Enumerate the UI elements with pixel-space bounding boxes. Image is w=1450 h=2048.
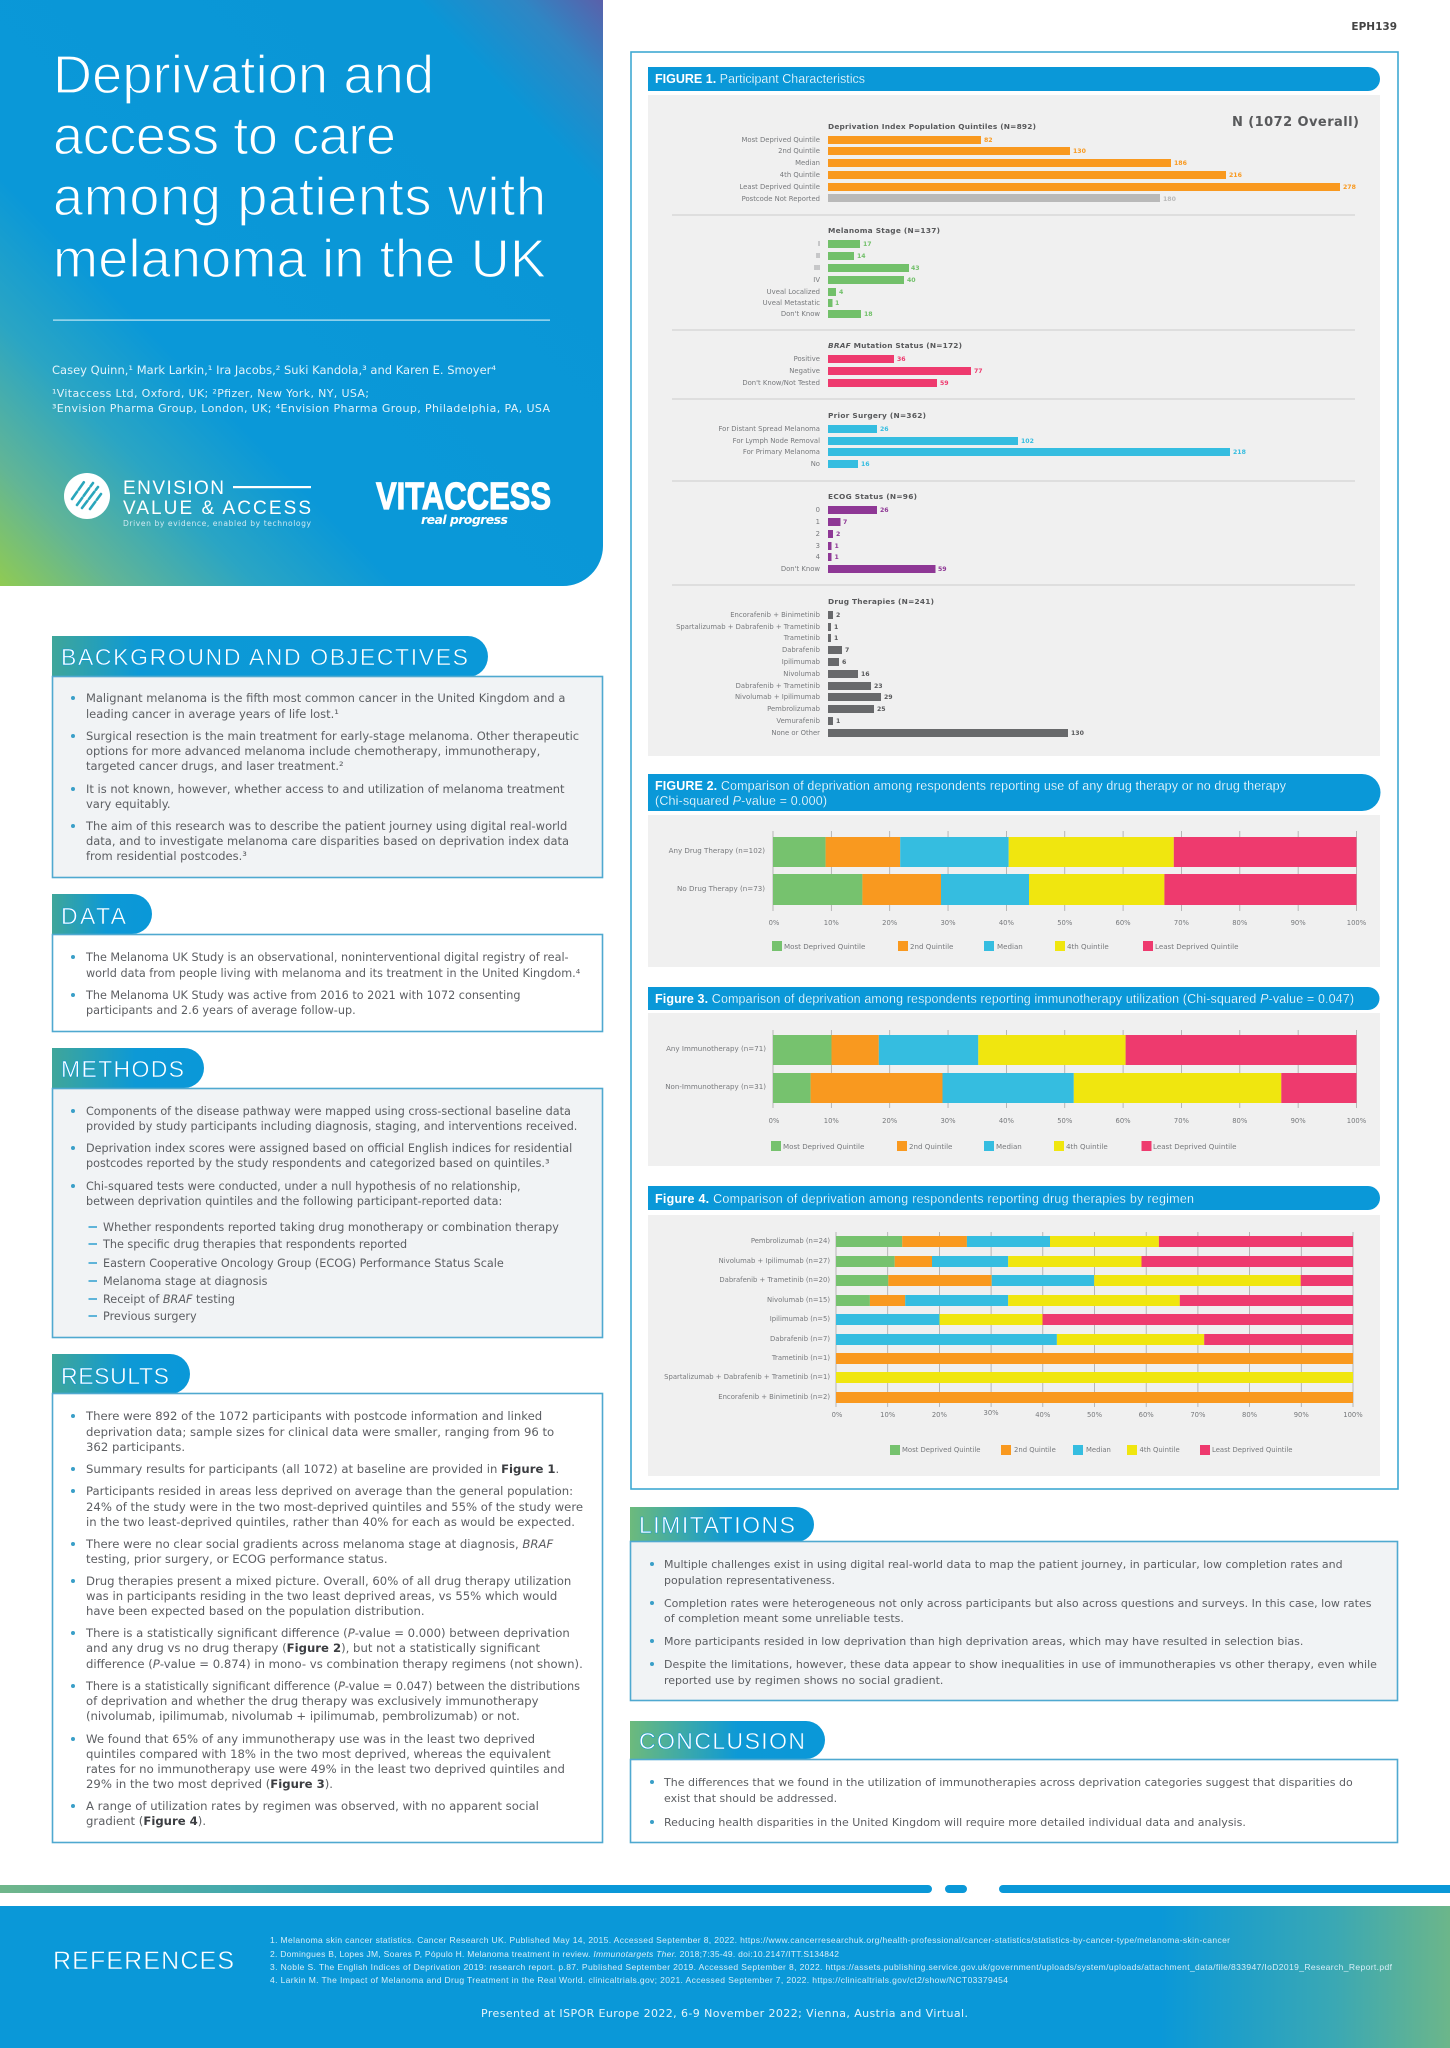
chart: drug therapies: Pembrolizumab: [767, 705, 820, 713]
axis labels: 70%: [1190, 1411, 1206, 1419]
heading: conclusion: [630, 1721, 825, 1759]
heading: results: [52, 1354, 190, 1394]
chart: drug therapies: Drug Therapies (N=241): [828, 597, 934, 606]
row labels: Nivolumab + Ipilimumab (n=27): [719, 1257, 830, 1265]
chart: melanoma stage: [763, 226, 940, 318]
axis labels: 90%: [1291, 919, 1306, 927]
results text: There is a statistically significant difference (P-value = 0.000) between deprivation: [86, 1626, 570, 1640]
chart: deprivation index quintiles: 82: [984, 137, 993, 144]
axis labels: 40%: [1035, 1411, 1051, 1419]
chart: ECOG status: 7: [843, 519, 847, 526]
axis labels: 30%: [940, 919, 956, 927]
chart: drug therapies: 25: [877, 706, 886, 713]
chart: BRAF mutation status: BRAF Mutation Status (N=172): [828, 341, 962, 350]
limitations text: More participants resided in low deprivation than high deprivation areas, which may have resulted in selection bias.: [664, 1635, 1303, 1648]
row labels: Non-Immunotherapy (n=31): [665, 1082, 766, 1091]
stacked bars by regimen: [836, 1236, 1353, 1403]
results text: There were 892 of the 1072 participants with postcode information and linked: [85, 1409, 542, 1423]
legend: Median: [996, 1142, 1022, 1151]
background text: from residential postcodes.³: [86, 849, 247, 863]
legend: 2nd Quintile: [1014, 1446, 1056, 1454]
chart: prior surgery: Prior Surgery (N=362): [828, 411, 926, 420]
chart: prior surgery: [718, 411, 1246, 468]
heading: methods: METHODS: [61, 1056, 184, 1082]
footer stripe: [0, 1885, 1450, 1893]
legend: Least Deprived Quintile: [1212, 1446, 1293, 1454]
data text: world data from people living with melanoma and its treatment in the United Kingdom.⁴: [86, 967, 581, 980]
dashes: [88, 1227, 97, 1316]
axis labels: 70%: [1174, 919, 1190, 927]
title: melanoma in the UK: [53, 229, 546, 289]
chart: deprivation index quintiles: Median: [795, 159, 820, 167]
chart: drug therapies: Spartalizumab + Dabrafenib + Trametinib: [676, 623, 820, 631]
figure 3 chart panel: [648, 1013, 1380, 1166]
background text: The aim of this research was to describe the patient journey using digital real-world: [85, 819, 567, 833]
figure 2 header: [648, 774, 1380, 811]
row labels: [665, 1044, 766, 1091]
results text: 362 participants.: [86, 1440, 185, 1454]
reference list: 3. Noble S. The English Indices of Deprivation 2019: research report. p.87. Published September 2019. Accessed September 8, 2022. https://assets.publishing.service.gov.uk/government/uploads/system/uploads/attachment_data/file/833947/IoD2019_Research_Report.pdf: [270, 1962, 1393, 1972]
chart: deprivation index quintiles: 180: [1163, 196, 1177, 203]
affiliations: ¹Vitaccess Ltd, Oxford, UK; ²Pfizer, New York, NY, USA;: [52, 387, 369, 400]
methods sub-list: Receipt of BRAF testing: [103, 1293, 235, 1306]
chart: deprivation index quintiles: 4th Quintile: [780, 171, 820, 179]
axis labels: 90%: [1291, 1117, 1306, 1125]
background text: options for more advanced melanoma include chemotherapy, immunotherapy,: [86, 744, 540, 758]
chart: deprivation index quintiles: 130: [1073, 148, 1087, 155]
chart: prior surgery: For Lymph Node Removal: [733, 437, 820, 445]
figure 4 header: [648, 1186, 1380, 1210]
chart: drug therapies: 7: [845, 647, 849, 654]
chart: drug therapies: Dabrafenib + Trametinib: [736, 682, 820, 690]
reference list: [270, 1935, 1393, 1985]
heading: background and objectives: BACKGROUND AND OBJECTIVES: [61, 644, 468, 670]
chart: prior surgery: 16: [861, 461, 870, 468]
results text: (nivolumab, ipilimumab, nivolumab + ipilimumab, pembrolizumab) or not.: [86, 1709, 520, 1723]
heading: data: DATA: [61, 903, 127, 929]
chart: melanoma stage: Uveal Metastatic: [763, 299, 820, 307]
axis labels: 60%: [1139, 1411, 1154, 1419]
data text: The Melanoma UK Study is an observational, noninterventional digital registry of real-: [85, 951, 569, 964]
logo: Envision Value and Access: ENVISION: [123, 478, 224, 499]
axis labels: 40%: [999, 919, 1014, 927]
chart: ECOG status: 1: [834, 543, 839, 550]
heading: results: RESULTS: [61, 1363, 169, 1389]
reference list: 4. Larkin M. The Impact of Melanoma and Drug Treatment in the Real World. clinicaltrials.gov; 2021. Accessed September 7, 2022. https://clinicaltrials.gov/ct2/show/NCT03379454: [270, 1975, 1008, 1985]
data text: The Melanoma UK Study was active from 2016 to 2021 with 1072 consenting: [85, 989, 521, 1002]
results text: 24% of the study were in the two most-deprived quintiles and 55% of the study were: [86, 1500, 583, 1514]
chart: drug therapies: 1: [836, 718, 840, 725]
axis labels: 50%: [1087, 1411, 1103, 1419]
chart: drug therapies: Dabrafenib: [782, 646, 820, 654]
figure 2 header: FIGURE 2. Comparison of deprivation among respondents reporting use of any drug therapy or no drug therapy: [655, 779, 1287, 793]
chart: ECOG status: [781, 492, 947, 573]
figure 1 chart panel: [648, 95, 1380, 756]
stacked bar: non-immunotherapy: [773, 1073, 1356, 1103]
axis labels: [832, 1409, 1363, 1419]
chart: drug therapies: [676, 597, 1085, 737]
chart: BRAF mutation status: 36: [897, 356, 906, 363]
chart: prior surgery: 218: [1233, 449, 1246, 456]
poster code: EPH139: [1351, 21, 1397, 33]
methods sub-list: The specific drug therapies that respondents reported: [102, 1238, 407, 1251]
chart: prior surgery: 102: [1021, 438, 1034, 445]
chart: deprivation index quintiles: [739, 122, 1356, 203]
legend: 4th Quintile: [1067, 942, 1109, 951]
legend: Least Deprived Quintile: [1155, 942, 1238, 951]
chart: deprivation index quintiles: 186: [1174, 160, 1187, 167]
chart: ECOG status: Don't Know: [781, 565, 820, 573]
logo: Envision Value and Access: VALUE & ACCESS: [123, 498, 311, 519]
grid lines: [773, 1030, 1356, 1108]
chart: drug therapies: Ipilimumab: [782, 658, 820, 666]
chart: melanoma stage: 14: [857, 253, 866, 260]
row labels: Nivolumab (n=15): [767, 1296, 830, 1304]
stacked bar: any drug therapy: [773, 837, 1356, 867]
panel: data: [52, 934, 602, 1032]
figure 3 header: [648, 987, 1380, 1010]
figures frame: [631, 52, 1398, 1489]
chart: drug therapies: 23: [874, 683, 883, 690]
chart: melanoma stage: Melanoma Stage (N=137): [828, 226, 940, 235]
figure 3 header: Figure 3. Comparison of deprivation among respondents reporting immunotherapy utilization (Chi-squared P-value = 0.047): [655, 992, 1354, 1006]
heading: limitations: LIMITATIONS: [639, 1512, 795, 1538]
references heading: REFERENCES: [53, 1947, 234, 1975]
results text: A range of utilization rates by regimen was observed, with no apparent social: [86, 1799, 539, 1813]
methods text: Components of the disease pathway were mapped using cross-sectional baseline data: [86, 1105, 571, 1118]
chart: ECOG status: ECOG Status (N=96): [828, 492, 917, 501]
overall N callout: N (1072 Overall): [1232, 115, 1359, 130]
axis labels: 70%: [1174, 1117, 1190, 1125]
results text: 29% in the two most deprived (Figure 3).: [86, 1777, 333, 1791]
limitations text: Completion rates were heterogeneous not only across participants but also across questions and surveys. In this case, low rates: [664, 1597, 1372, 1610]
panel: results: [52, 1394, 602, 1842]
methods sub-list: Whether respondents reported taking drug monotherapy or combination therapy: [103, 1221, 559, 1234]
chart: melanoma stage: Don't Know: [781, 310, 820, 318]
axis labels: 100%: [1343, 1411, 1363, 1419]
chart: melanoma stage: 40: [907, 277, 916, 284]
chart: deprivation index quintiles: Postcode Not Reported: [742, 195, 820, 203]
results text: Summary results for participants (all 1072) at baseline are provided in Figure 1.: [86, 1462, 559, 1476]
row labels: [669, 846, 765, 893]
chart: deprivation index quintiles: Least Deprived Quintile: [739, 183, 820, 191]
row labels: No Drug Therapy (n=73): [677, 884, 765, 893]
title: access to care: [53, 106, 396, 166]
row labels: Dabrafenib + Trametinib (n=20): [719, 1276, 830, 1284]
axis labels: 80%: [1242, 1411, 1258, 1419]
affiliations: [52, 387, 550, 415]
chart: ECOG status: 59: [938, 566, 947, 573]
figure 4 header: Figure 4. Comparison of deprivation among respondents reporting drug therapies by regimen: [655, 1192, 1194, 1206]
title panel: [0, 0, 603, 586]
row labels: Dabrafenib (n=7): [770, 1335, 830, 1343]
legend: 2nd Quintile: [910, 942, 953, 951]
bullets: [71, 698, 75, 826]
presentation note: Presented at ISPOR Europe 2022, 6-9 November 2022; Vienna, Austria and Virtual.: [481, 2007, 968, 2020]
row labels: Any Drug Therapy (n=102): [669, 846, 765, 855]
panel: background and objectives: [52, 676, 602, 878]
bullets: [71, 1416, 75, 1806]
chart: ECOG status: 4: [816, 553, 820, 561]
axis labels: 30%: [940, 1117, 956, 1125]
axis labels: 100%: [1347, 1117, 1367, 1125]
axis labels: 20%: [882, 1117, 898, 1125]
bullets: [71, 1111, 75, 1186]
results text: testing, prior surgery, or ECOG performance status.: [86, 1552, 388, 1566]
logo: Envision Value and Access: Driven by evidence, enabled by technology: [123, 519, 312, 528]
chart: drug therapies: None or Other: [771, 729, 820, 737]
row labels: [664, 1237, 830, 1401]
conclusion text: Reducing health disparities in the United Kingdom will require more detailed individual data and analysis.: [664, 1816, 1246, 1829]
panel: conclusion: [630, 1760, 1398, 1842]
chart: melanoma stage: I: [818, 240, 820, 248]
background text: vary equitably.: [86, 797, 171, 811]
methods sub-list: Previous surgery: [103, 1310, 197, 1323]
title: among patients with: [53, 167, 546, 227]
results text: Drug therapies present a mixed picture. Overall, 60% of all drug therapy utilization: [86, 1574, 571, 1588]
chart: BRAF mutation status: [742, 341, 983, 387]
axis labels: 80%: [1232, 919, 1248, 927]
results text: Participants resided in areas less deprived on average than the general population:: [86, 1484, 573, 1498]
legend: Least Deprived Quintile: [1153, 1142, 1236, 1151]
bullets: [71, 957, 75, 995]
axis labels: 60%: [1116, 1117, 1131, 1125]
chart: drug therapies: Trametinib: [783, 634, 820, 642]
chart: drug therapies: 1: [834, 624, 838, 631]
chart: ECOG status: 1: [834, 554, 839, 561]
methods sub-list: Eastern Cooperative Oncology Group (ECOG) Performance Status Scale: [103, 1257, 504, 1270]
axis labels: 20%: [882, 919, 898, 927]
chart: BRAF mutation status: Negative: [789, 367, 820, 375]
legend: Most Deprived Quintile: [783, 1142, 864, 1151]
background text: data, and to investigate melanoma care disparities based on deprivation index data: [86, 834, 569, 848]
limitations text: reported use by regimen shows no social gradient.: [664, 1674, 943, 1687]
legend: Median: [1086, 1446, 1111, 1454]
authors: Casey Quinn,¹ Mark Larkin,¹ Ira Jacobs,² Suki Kandola,³ and Karen E. Smoyer⁴: [52, 363, 496, 377]
chart: drug therapies: Vemurafenib: [776, 717, 820, 725]
row labels: Pembrolizumab (n=24): [751, 1237, 830, 1245]
chart: BRAF mutation status: 77: [974, 368, 983, 375]
chart: ECOG status: 2: [816, 530, 820, 538]
limitations text: Multiple challenges exist in using digital real-world data to map the patient journey, in particular, low completion rates and: [664, 1558, 1343, 1571]
chart: prior surgery: For Distant Spread Melanoma: [718, 425, 820, 433]
title: [53, 45, 546, 289]
conclusion text: The differences that we found in the utilization of immunotherapies across deprivation categories suggest that disparities do: [663, 1776, 1353, 1789]
chart: BRAF mutation status: Don't Know/Not Tested: [742, 379, 820, 387]
results text: of deprivation and whether the drug therapy was exclusively immunotherapy: [86, 1694, 539, 1708]
background text: leading cancer in average years of life lost.¹: [86, 707, 339, 721]
chart: drug therapies: 6: [842, 659, 846, 666]
axis labels: 10%: [880, 1411, 896, 1419]
chart: drug therapies: 29: [884, 694, 893, 701]
legend: [772, 941, 1238, 951]
methods text: Chi-squared tests were conducted, under a null hypothesis of no relationship,: [86, 1180, 521, 1193]
figure 4 chart panel: [648, 1215, 1380, 1476]
results text: and any drug vs no drug therapy (Figure 2), but not a statistically significant: [86, 1641, 540, 1655]
affiliations: ³Envision Pharma Group, London, UK; ⁴Envision Pharma Group, Philadelphia, PA, USA: [52, 402, 550, 415]
results line: P-value 0.047: There is a statistically significant difference (P-value = 0.047) between the distributions: [85, 1680, 580, 1693]
legend: 4th Quintile: [1066, 1142, 1108, 1151]
grid lines: [773, 831, 1356, 911]
axis labels: 60%: [1116, 919, 1131, 927]
methods text: between deprivation quintiles and the following participant-reported data:: [86, 1195, 502, 1208]
axis labels: 40%: [999, 1117, 1014, 1125]
conclusion text: exist that should be addressed.: [664, 1792, 837, 1805]
legend: Median: [997, 942, 1023, 951]
logo: Envision Value and Access: [64, 473, 312, 528]
row labels: Any Immunotherapy (n=71): [666, 1044, 766, 1053]
row labels: Encorafenib + Binimetinib (n=2): [718, 1393, 830, 1401]
chart: melanoma stage: IV: [813, 276, 820, 284]
data text: participants and 2.6 years of average follow-up.: [86, 1004, 356, 1017]
chart: deprivation index quintiles: Most Deprived Quintile: [742, 136, 820, 144]
results text: rates for no immunotherapy use were 49% in the least two deprived quintiles and: [86, 1762, 565, 1776]
chart: melanoma stage: II: [816, 252, 820, 260]
chart: melanoma stage: Uveal Localized: [767, 288, 820, 296]
figure 1 header: FIGURE 1. Participant Characteristics: [655, 72, 865, 86]
axis labels: 30%: [984, 1409, 999, 1417]
references footer: [0, 1906, 1450, 2048]
chart: drug therapies: 16: [861, 671, 870, 678]
chart: BRAF mutation status: 59: [940, 380, 949, 387]
title divider: [53, 320, 550, 321]
results text: have been expected based on the population distribution.: [86, 1604, 425, 1618]
figure 2 header: (Chi-squared P-value = 0.000): [655, 794, 827, 808]
chart: drug therapies: 130: [1071, 730, 1085, 737]
results text: in the two least-deprived quintiles, rather than 40% for each as would be expected.: [86, 1515, 575, 1529]
grid lines: [836, 1232, 1353, 1407]
chart: drug therapies: 1: [834, 635, 838, 642]
heading: limitations: [630, 1507, 814, 1542]
axis labels: 50%: [1057, 919, 1073, 927]
results text: gradient (Figure 4).: [86, 1814, 206, 1828]
methods text: provided by study participants including diagnosis, staging, and interventions received.: [86, 1120, 577, 1133]
logo: Vitaccess: VITACCESS: [376, 476, 551, 518]
chart: ECOG status: 1: [816, 518, 820, 526]
chart: melanoma stage: 4: [839, 289, 844, 296]
chart: prior surgery: No: [811, 460, 820, 468]
methods sub-list: Melanoma stage at diagnosis: [103, 1275, 268, 1288]
background text: targeted cancer drugs, and laser treatment.²: [86, 759, 344, 773]
bullets: [650, 1782, 654, 1822]
methods text: Deprivation index scores were assigned based on official English indices for residential: [86, 1142, 572, 1155]
stacked bar: any immunotherapy: [773, 1035, 1356, 1065]
results text: We found that 65% of any immunotherapy use was in the least two deprived: [86, 1732, 535, 1746]
axis labels: 10%: [824, 1117, 839, 1125]
bullets: [650, 1564, 654, 1664]
axis labels: 90%: [1294, 1411, 1309, 1419]
chart: melanoma stage: III: [814, 264, 820, 272]
background text: It is not known, however, whether access to and utilization of melanoma treatment: [86, 782, 565, 796]
figure 2 chart panel: [648, 815, 1380, 967]
chart: ECOG status: 2: [836, 531, 840, 538]
chart: BRAF mutation status: Positive: [794, 355, 820, 363]
results text: There were no clear social gradients across melanoma stage at diagnosis, BRAF: [86, 1537, 553, 1551]
background text: Malignant melanoma is the fifth most common cancer in the United Kingdom and a: [86, 691, 565, 705]
row labels: Ipilimumab (n=5): [770, 1315, 830, 1323]
stacked bar: no drug therapy: [773, 874, 1356, 905]
logo: Vitaccess: [376, 476, 551, 527]
chart: deprivation index quintiles: 2nd Quintile: [778, 147, 820, 155]
row labels: Spartalizumab + Dabrafenib + Trametinib (n=1): [664, 1373, 830, 1381]
reference list: 1. Melanoma skin cancer statistics. Cancer Research UK. Published May 14, 2015. Accessed September 8, 2022. https://www.cancerresearchuk.org/health-professional/cancer-statistics/statistics-by-cancer-type/melanoma-skin-cancer: [270, 1935, 1230, 1945]
logo: Vitaccess: real progress: [421, 512, 508, 527]
chart: ECOG status: 0: [816, 506, 820, 514]
results text: difference (P-value = 0.874) in mono- vs combination therapy regimens (not shown).: [86, 1657, 583, 1671]
chart: drug therapies: Nivolumab: [783, 670, 820, 678]
background text: Surgical resection is the main treatment for early-stage melanoma. Other therapeutic: [86, 729, 579, 743]
chart: deprivation index quintiles: 216: [1229, 172, 1242, 179]
axis labels: 0%: [769, 919, 780, 927]
chart: melanoma stage: 18: [864, 311, 873, 318]
reference list: 2. Domingues B, Lopes JM, Soares P, Pópulo H. Melanoma treatment in review. Immunotargets Ther. 2018;7:35-49. doi:10.2147/ITT.S134842: [270, 1949, 839, 1959]
chart: drug therapies: Nivolumab + Ipilimumab: [735, 693, 820, 701]
axis labels: 10%: [824, 919, 839, 927]
chart: prior surgery: For Primary Melanoma: [743, 448, 820, 456]
axis labels: 50%: [1057, 1117, 1073, 1125]
legend: 2nd Quintile: [909, 1142, 952, 1151]
row labels: Trametinib (n=1): [771, 1354, 830, 1362]
limitations text: population representativeness.: [664, 1574, 835, 1587]
results text: quintiles compared with 18% in the two most deprived, whereas the equivalent: [86, 1747, 551, 1761]
axis labels: 0%: [769, 1117, 780, 1125]
legend: Most Deprived Quintile: [784, 942, 865, 951]
figure 1 header: [648, 67, 1380, 91]
legend: [890, 1445, 1293, 1455]
legend: [771, 1141, 1236, 1151]
panel: methods: [52, 1088, 602, 1338]
chart: prior surgery: 26: [880, 426, 889, 433]
chart: deprivation index quintiles: 278: [1343, 184, 1356, 191]
legend: Most Deprived Quintile: [902, 1446, 980, 1454]
axis labels: [769, 919, 1367, 927]
methods text: postcodes reported by the study respondents and categorized based on quintiles.³: [86, 1157, 549, 1170]
limitations text: of completion meant some unreliable tests.: [664, 1612, 904, 1625]
chart: deprivation index quintiles: Deprivation Index Population Quintiles (N=892): [828, 122, 1036, 131]
axis labels: 0%: [832, 1411, 843, 1419]
results text: was in participants residing in the two least deprived areas, vs 55% which would: [86, 1589, 557, 1603]
limitations text: Despite the limitations, however, these data appear to show inequalities in use of immunotherapies vs other therapy, even while: [664, 1658, 1377, 1671]
chart: drug therapies: Encorafenib + Binimetinib: [730, 611, 820, 619]
title: Deprivation and: [53, 45, 434, 105]
heading: methods: [52, 1048, 204, 1088]
dividers: [672, 215, 1355, 585]
heading: background and objectives: [52, 636, 488, 677]
axis labels: [769, 1117, 1367, 1125]
panel: limitations: [630, 1542, 1398, 1700]
heading: data: [52, 894, 152, 934]
chart: ECOG status: 26: [880, 507, 889, 514]
heading: conclusion: CONCLUSION: [639, 1728, 805, 1754]
results text: deprivation data; sample sizes for clinical data were smaller, ranging from 96 to: [86, 1425, 554, 1439]
chart: melanoma stage: 43: [911, 265, 920, 272]
axis labels: 20%: [932, 1411, 947, 1419]
chart: drug therapies: 2: [836, 612, 840, 619]
axis labels: 80%: [1232, 1117, 1248, 1125]
chart: melanoma stage: 1: [835, 300, 839, 307]
legend: 4th Quintile: [1140, 1446, 1180, 1454]
axis labels: 100%: [1347, 919, 1367, 927]
chart: melanoma stage: 17: [863, 241, 872, 248]
chart: ECOG status: 3: [816, 542, 820, 550]
